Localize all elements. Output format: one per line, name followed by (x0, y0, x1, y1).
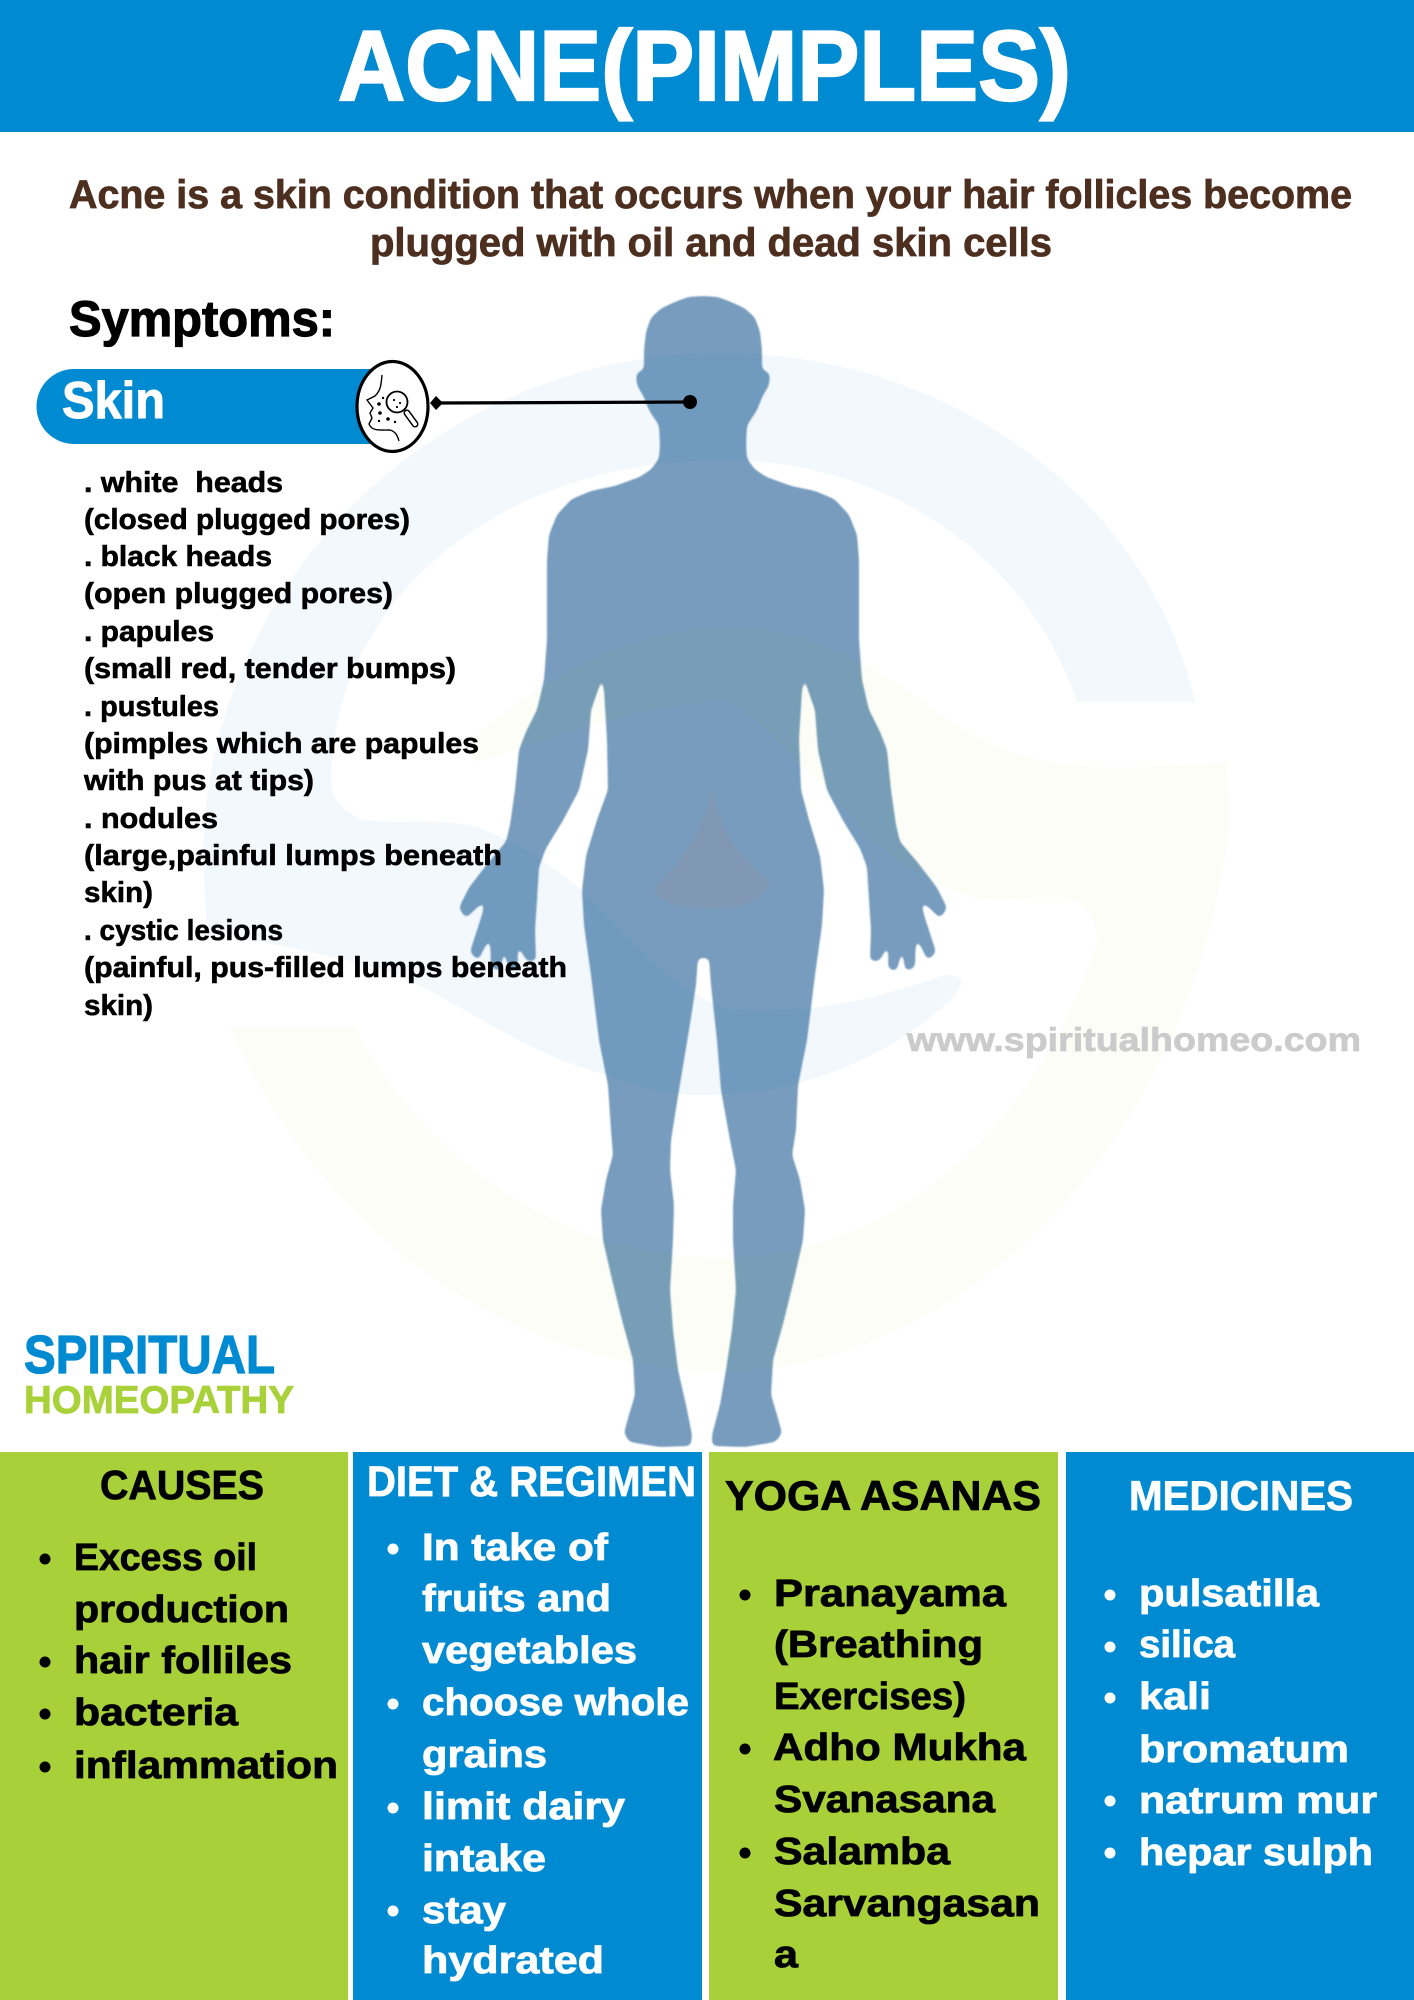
panel: diet and regimen: grains (422, 1734, 547, 1776)
panel: diet and regimen: vegetables (422, 1630, 637, 1672)
panel: yoga asanas: Adho Mukha (773, 1727, 1027, 1769)
panel: medicines: kali (1139, 1676, 1211, 1718)
panel: causes: Excess oil (74, 1537, 257, 1579)
panel: diet and regimen (353, 1452, 702, 2000)
panel: diet and regimen: intake (422, 1838, 546, 1880)
panel: causes: bacteria (74, 1692, 239, 1734)
panel: causes: hair folliles (74, 1640, 292, 1682)
panel: causes: CAUSES (100, 1462, 264, 1508)
panel: medicines: hepar sulph (1139, 1832, 1373, 1874)
symptoms list: (small red, tender bumps) (84, 653, 456, 685)
symptoms list: skin) (84, 877, 153, 909)
panel: yoga asanas: Exercises) (774, 1676, 966, 1718)
panel: diet and regimen: stay (422, 1890, 506, 1932)
panel: causes: inflammation (74, 1745, 338, 1787)
panel: yoga asanas: Pranayama (774, 1573, 1007, 1615)
watermark logo (203, 353, 1229, 1371)
symptoms list: (closed plugged pores) (84, 504, 410, 536)
panel: medicines: silica (1139, 1624, 1236, 1666)
icon: face with magnifier (357, 362, 428, 452)
panel: yoga asanas: Svanasana (774, 1779, 996, 1821)
skin pill label: Skin (62, 372, 165, 430)
symptoms list: (large,painful lumps beneath (84, 840, 502, 872)
panel: yoga asanas: (Breathing (774, 1624, 983, 1666)
panel: medicines: natrum mur (1139, 1780, 1377, 1822)
panel: diet and regimen: In take of (422, 1527, 608, 1569)
panel: yoga asanas: a (774, 1934, 799, 1976)
brand logo text: SPIRITUAL (24, 1325, 275, 1385)
header band (0, 0, 1414, 132)
panel: diet and regimen: DIET & REGIMEN (367, 1458, 696, 1506)
panel: medicines (1066, 1452, 1414, 2000)
brand logo text: HOMEOPATHY (24, 1379, 294, 1422)
intro text: Acne is a skin condition that occurs when your hair follicles become (69, 173, 1352, 217)
symptoms list: . cystic lesions (84, 915, 283, 947)
skin pill label (36, 369, 385, 444)
panel: diet and regimen: hydrated (422, 1940, 604, 1982)
symptoms list: . papules (84, 616, 214, 648)
title: ACNE(PIMPLES) (338, 10, 1071, 121)
intro text (69, 173, 1352, 265)
panel: yoga asanas: Sarvangasan (774, 1883, 1040, 1925)
panel: yoga asanas: YOGA ASANAS (725, 1472, 1041, 1519)
symptoms list (83, 467, 567, 1022)
panel: diet and regimen: limit dairy (422, 1786, 625, 1828)
body silhouette (460, 297, 946, 1446)
website watermark: www.spiritualhomeo.com (906, 1021, 1361, 1058)
pointer line to head (430, 395, 697, 410)
symptoms list: skin) (84, 990, 153, 1022)
panel: diet and regimen: choose whole (422, 1682, 689, 1724)
intro text: plugged with oil and dead skin cells (370, 221, 1052, 265)
symptoms list: . black heads (84, 541, 272, 573)
panel: diet and regimen: fruits and (422, 1578, 611, 1620)
symptoms list: . pustules (84, 691, 219, 723)
symptoms list: with pus at tips) (83, 765, 314, 797)
symptoms list: (painful, pus-filled lumps beneath (84, 952, 567, 984)
panel: yoga asanas (709, 1452, 1058, 2000)
panel: causes (0, 1452, 348, 2000)
panel: medicines: MEDICINES (1129, 1472, 1353, 1519)
panel: medicines: bromatum (1139, 1729, 1349, 1771)
symptoms list: . nodules (84, 803, 218, 835)
panel: causes: production (74, 1589, 289, 1631)
panel: yoga asanas: Salamba (774, 1831, 951, 1873)
symptoms list: . white heads (84, 467, 283, 499)
brand logo text (24, 1325, 294, 1422)
panel: medicines: pulsatilla (1139, 1573, 1320, 1615)
symptoms list: (pimples which are papules (84, 728, 479, 760)
symptoms heading: Symptoms: (69, 291, 335, 347)
symptoms list: (open plugged pores) (84, 578, 393, 610)
